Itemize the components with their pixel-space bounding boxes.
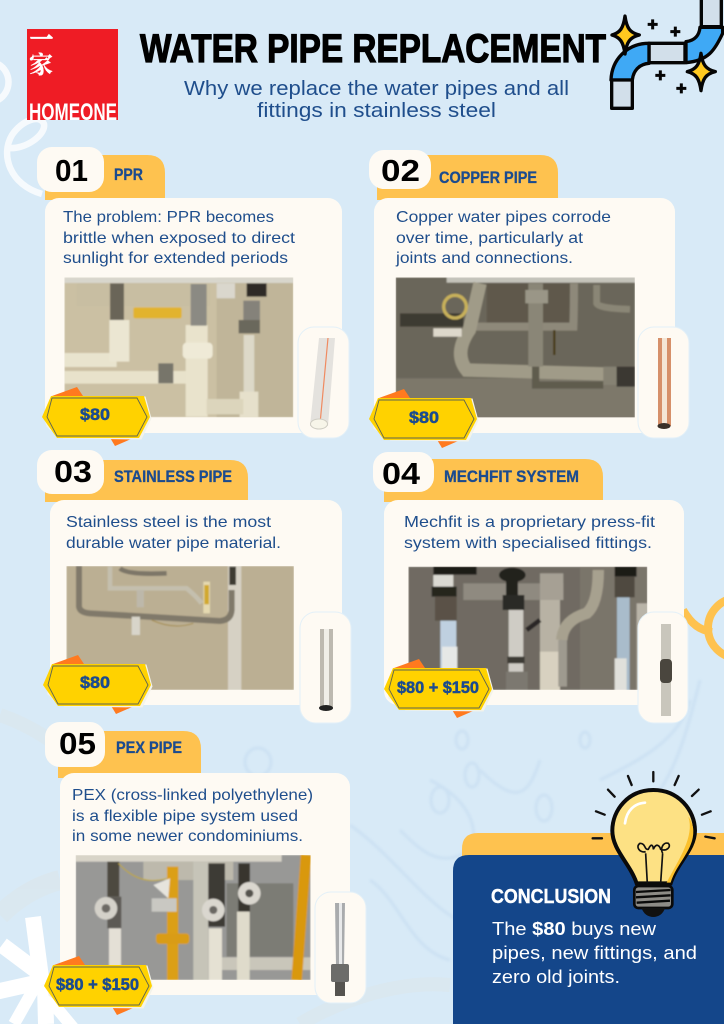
- text 02: Copper water pipes corrode: [396, 209, 611, 226]
- heading copper pipe: COPPER PIPE: [439, 169, 537, 187]
- number 05: 05: [59, 726, 96, 761]
- icon: light bulb: [593, 772, 715, 917]
- text 05: [72, 787, 313, 845]
- heading PEX pipe: PEX PIPE: [116, 739, 182, 757]
- price badge 03: $80: [80, 673, 110, 692]
- price badge 01: $80: [80, 405, 110, 424]
- tab 01: [45, 155, 165, 200]
- text 05: is a flexible pipe system used: [72, 808, 298, 825]
- price badge 04: $80 + $150: [397, 678, 479, 697]
- chip 02: [369, 150, 431, 189]
- heading PPR: PPR: [114, 166, 143, 184]
- conclusion tab: [462, 833, 724, 860]
- logo: Homeone: HOMEONE: [29, 99, 117, 126]
- photo 04: [408, 567, 647, 690]
- tab 03: [45, 460, 248, 502]
- conclusion heading: CONCLUSION: [491, 886, 611, 908]
- heading mechfit system: MECHFIT SYSTEM: [444, 468, 579, 486]
- text 02: joints and connections.: [395, 250, 573, 267]
- title: WATER PIPE REPLACEMENT: [140, 27, 606, 71]
- card 03: [50, 500, 342, 705]
- white swirl decoration: [0, 64, 44, 194]
- logo: Homeone: 一: [30, 21, 53, 54]
- panel 04: mechfit system: [373, 452, 688, 723]
- subtitle: [184, 78, 569, 122]
- subtitle: fittings in stainless steel: [257, 100, 496, 122]
- conclusion text: pipes, new fittings, and: [492, 943, 697, 963]
- card: pipe sample 05: [315, 892, 366, 1003]
- conclusion text: The $80 buys new: [492, 919, 657, 939]
- text 01: brittle when exposed to direct: [63, 230, 296, 247]
- card 02: [374, 198, 675, 433]
- orange ring decoration: [683, 598, 724, 658]
- price badge 05: $80 + $150: [56, 975, 139, 994]
- panel 01: PPR: [37, 147, 349, 446]
- text 04: [404, 514, 656, 552]
- price badge 02: $80: [409, 408, 439, 427]
- subtitle: Why we replace the water pipes and all: [184, 78, 569, 100]
- text 01: sunlight for extended periods: [63, 250, 288, 267]
- text 05: in some newer condominiums.: [72, 828, 303, 845]
- text 03: Stainless steel is the most: [66, 514, 272, 531]
- photo 03: [66, 566, 294, 690]
- pale arcs: [0, 715, 450, 1024]
- heading stainless pipe: STAINLESS PIPE: [114, 468, 232, 486]
- card: pipe sample 04: [638, 612, 688, 723]
- logo: Homeone: [27, 21, 118, 126]
- text 02: over time, particularly at: [396, 230, 584, 247]
- text 03: durable water pipe material.: [66, 535, 281, 552]
- text 01: [63, 209, 296, 267]
- icon: pipe with sparkles: [611, 0, 723, 108]
- card 01: [45, 198, 342, 433]
- number 01: 01: [55, 153, 88, 188]
- water splash decoration: [245, 680, 700, 960]
- card: pipe sample 01: [298, 327, 349, 438]
- tab 02: [377, 155, 558, 200]
- card 04: [384, 500, 684, 705]
- panel 02: copper pipe: [369, 150, 689, 448]
- text 04: Mechfit is a proprietary press-fit: [404, 514, 656, 531]
- price badge 02: [369, 389, 478, 448]
- conclusion card: [453, 855, 724, 1024]
- number 04: 04: [382, 456, 421, 491]
- white star decoration: [0, 917, 75, 1024]
- photo 02: [396, 277, 635, 418]
- card: pipe sample 03: [300, 612, 351, 723]
- chip 03: [37, 450, 104, 494]
- chip 04: [373, 452, 434, 492]
- photo 01: [64, 277, 293, 418]
- number 02: 02: [381, 153, 420, 188]
- conclusion text: zero old joints.: [492, 967, 620, 987]
- number 03: 03: [54, 454, 92, 489]
- chip 05: [45, 722, 105, 767]
- tab 04: [384, 459, 603, 502]
- text 01: The problem: PPR becomes: [63, 209, 274, 226]
- card: pipe sample 02: [638, 327, 689, 438]
- conclusion text: [492, 919, 697, 987]
- price badge 01: [42, 387, 152, 446]
- panel: conclusion: [453, 772, 724, 1024]
- logo: Homeone: 家: [29, 45, 53, 80]
- text 03: [66, 514, 281, 552]
- text 05: PEX (cross-linked polyethylene): [72, 787, 313, 804]
- card 05: [60, 773, 350, 995]
- text 04: system with specialised fittings.: [404, 535, 652, 552]
- photo 05: [76, 855, 311, 980]
- price badge 05: [44, 956, 154, 1015]
- panel 03: stainless pipe: [37, 450, 351, 723]
- price badge 03: [43, 655, 152, 714]
- price badge 04: [384, 659, 494, 718]
- tab 05: [58, 731, 201, 778]
- chip 01: [37, 147, 104, 192]
- panel 05: PEX pipe: [44, 722, 366, 1015]
- text 02: [395, 209, 611, 267]
